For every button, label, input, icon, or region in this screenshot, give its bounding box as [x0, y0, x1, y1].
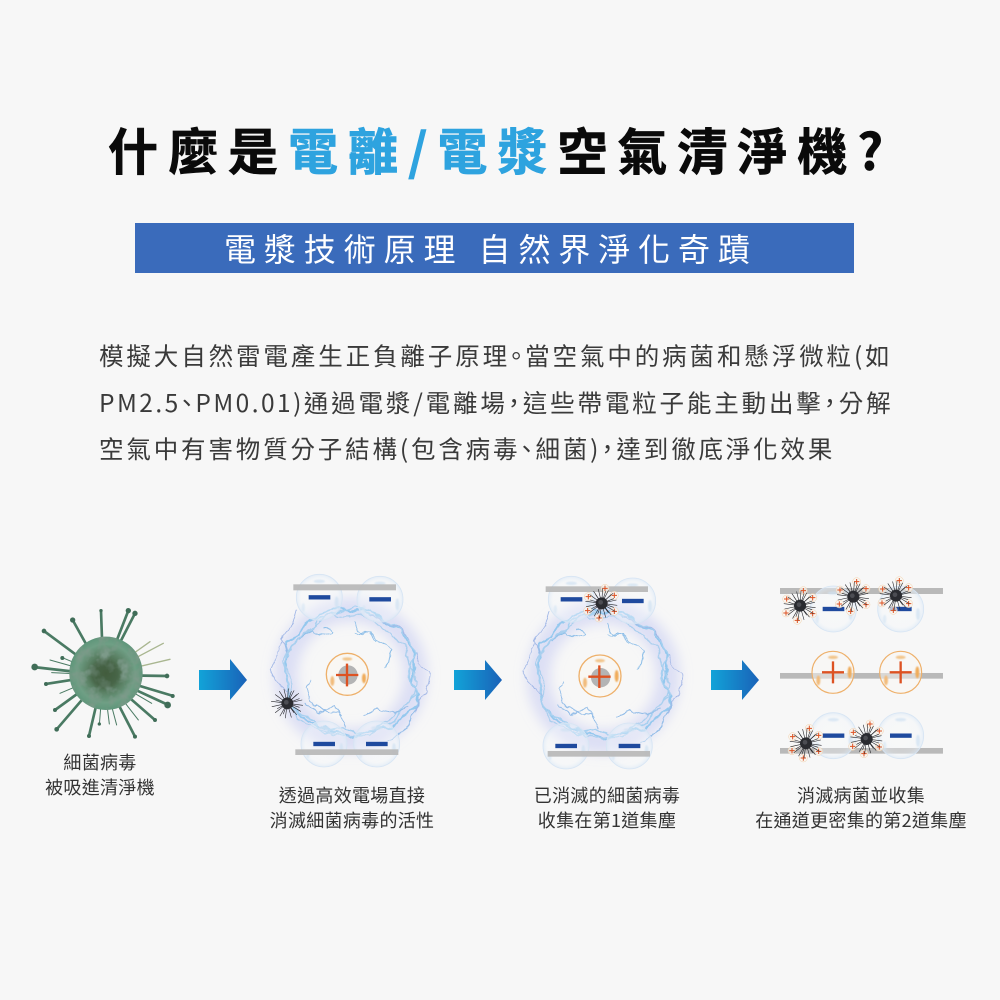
caption: step 3: 消滅病菌並收集: [797, 782, 925, 808]
lightning ring: [522, 608, 683, 743]
panel: step 3 second collection: [780, 577, 943, 762]
caption: virus: [45, 749, 155, 800]
caption: step 3: 在通道更密集的第2道集塵: [755, 807, 967, 833]
text block: description: 模擬大自然雷電產生正負離子原理。當空氣中的病菌和懸浮微粒(如: [99, 338, 893, 373]
banner: subtitle: [135, 223, 854, 273]
caption: step 3: [755, 782, 967, 833]
lightning ring: [270, 607, 430, 742]
banner: subtitle: 電漿技術原理 自然界淨化奇蹟: [224, 225, 758, 271]
text block: description: 空氣中有害物質分子結構(包含病毒、細菌)，達到徹底淨化效果: [99, 431, 835, 466]
caption: virus: 被吸進清淨機: [45, 774, 155, 800]
caption: step 1: 消滅細菌病毒的活性: [270, 807, 434, 833]
text block: description: PM2.5、PM0.01)通過電漿/電離場，這些帶電粒子能主動出擊，分解: [99, 385, 893, 420]
negative bubbles: [810, 586, 924, 759]
panel: step 1 electric field: [270, 574, 430, 767]
caption: virus: 細菌病毒: [63, 749, 137, 775]
negative bubbles and plates: [543, 576, 656, 769]
caption: step 1: [270, 782, 434, 833]
caption: step 2: 收集在第1道集塵: [538, 807, 676, 833]
text block: description: [99, 338, 893, 466]
germ: [271, 689, 303, 718]
caption: step 2: [534, 782, 680, 833]
negative bubbles and plates: [293, 574, 403, 767]
arrow 2: [454, 660, 502, 700]
charged germs: [782, 577, 913, 762]
title: 什麼是電離/電漿空氣清淨機?: [108, 113, 893, 185]
caption: step 1: 透過高效電場直接: [279, 782, 425, 808]
positive electrode: [579, 655, 621, 697]
virus illustration: [31, 608, 175, 739]
charged germ: [584, 584, 618, 622]
arrow 3: [711, 660, 759, 700]
panel: step 2 first collection: [522, 576, 683, 769]
arrow 1: [199, 659, 247, 700]
positive bubbles: [812, 651, 922, 693]
caption: step 2: 已消滅的細菌病毒: [534, 782, 680, 808]
plates: [780, 588, 943, 754]
positive electrode: [326, 653, 368, 695]
